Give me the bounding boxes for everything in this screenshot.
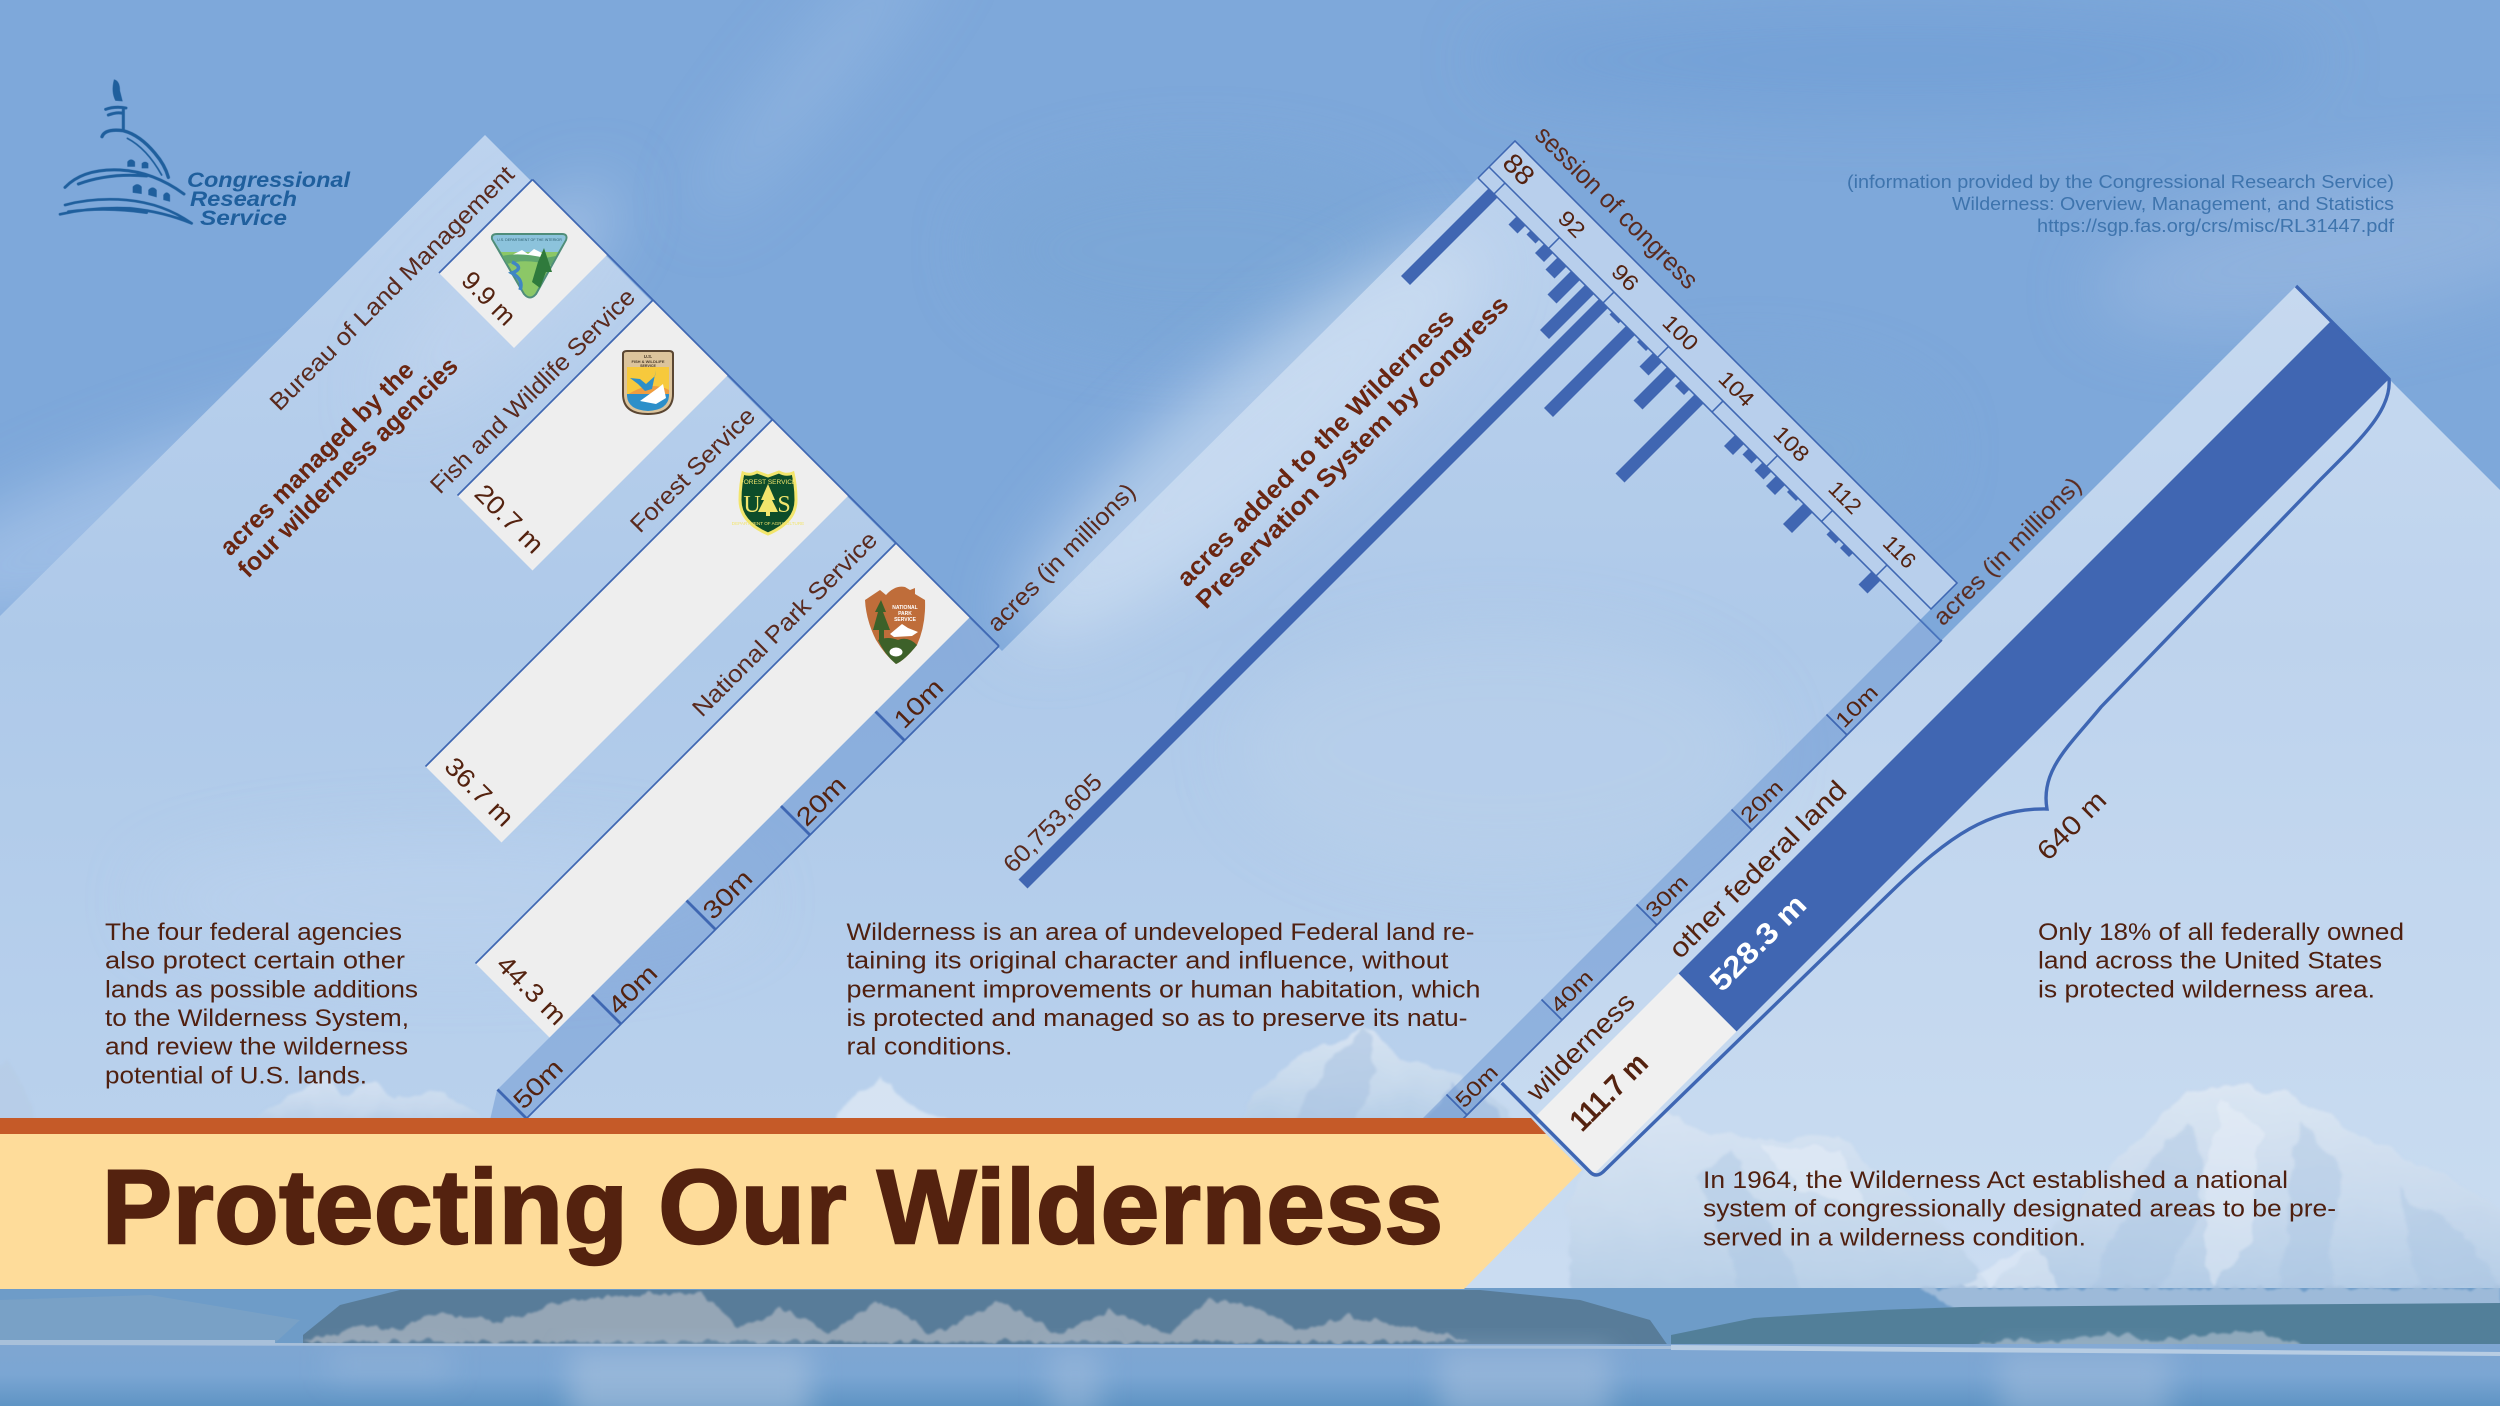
- text block: only 18 percent: is protected wilderness area.: [2038, 976, 2375, 1003]
- text block: 1964 act: system of congressionally designated areas to be pre-: [1703, 1196, 2336, 1223]
- icon: Bureau of Land Management badge: U.S. DEPARTMENT OF THE INTERIOR: [497, 238, 562, 242]
- icon: Forest Service badge: [732, 472, 804, 534]
- left distance: [0, 1295, 300, 1343]
- icon: National Park Service arrowhead: [865, 587, 925, 664]
- dome drawing: [60, 79, 192, 223]
- text block: wilderness definition: taining its original character and influence, without: [846, 948, 1449, 975]
- value: 20.7 m: 20.7 m: [469, 478, 550, 559]
- text block: wilderness definition: Wilderness is an area of undeveloped Federal land re-: [846, 919, 1474, 946]
- axis and bar edge lines: [0, 180, 999, 1202]
- session label: 100: 100: [1657, 310, 1703, 356]
- source note: Wilderness: Overview, Management, and Statistics: [1952, 193, 2394, 214]
- text block: wilderness definition: is protected and managed so as to preserve its natu-: [846, 1005, 1468, 1032]
- chart two: acres added by session of congress: [898, 120, 1978, 1222]
- orange stripe: [0, 1118, 1546, 1134]
- background: clouds: [0, 0, 2500, 669]
- chart one: acres managed by four agencies: [0, 161, 1141, 1203]
- session label: 116: 116: [1878, 530, 1921, 573]
- forest right: [1671, 1303, 2500, 1358]
- background: washed mountains: [0, 1026, 2500, 1300]
- value: 640 m: 640 m: [2031, 785, 2112, 866]
- right mountain base: [1920, 1288, 2500, 1312]
- icon: National Park Service arrowhead: NATIONAL: [892, 605, 918, 611]
- text block: wilderness definition: ral conditions.: [846, 1034, 1012, 1061]
- text block: four federal agencies: lands as possible additions: [105, 976, 418, 1003]
- label: Forest Service: Forest Service: [625, 402, 761, 538]
- agency bars: [0, 180, 999, 1202]
- axis band tail: [490, 1090, 527, 1120]
- icon: Forest Service badge: FOREST SERVICE: [740, 479, 797, 486]
- session label: 108: 108: [1768, 421, 1814, 467]
- mountain shading: [1700, 1120, 2500, 1290]
- value: 528.3 m: 528.3 m: [1704, 888, 1813, 998]
- band base: [0, 1288, 2500, 1348]
- shorelines: [0, 1340, 1671, 1349]
- wordmark line 2: Research: [190, 188, 297, 211]
- bar: National Park Service: [476, 543, 970, 1038]
- text block: 1964 act: served in a wilderness condition.: [1703, 1224, 2086, 1251]
- session label: 92: 92: [1553, 205, 1590, 243]
- wordmark line 3: Service: [200, 207, 287, 230]
- icon: National Park Service arrowhead: PARK: [898, 611, 912, 617]
- source note: [1847, 171, 2395, 236]
- text block: 1964 act: [1703, 1167, 2336, 1251]
- heading: acres managed: acres managed by the: [214, 356, 420, 561]
- axis band fill: [1420, 620, 1942, 1141]
- text block: 1964 act: In 1964, the Wilderness Act established a national: [1703, 1167, 2288, 1194]
- value: 44.3 m: 44.3 m: [491, 949, 573, 1031]
- axis label: 20m: 20m: [1736, 776, 1788, 828]
- banner: title strip: [0, 1118, 1582, 1289]
- source note: (information provided by the Congressional Research Service): [1847, 171, 2394, 192]
- label: acres in millions: acres (in millions): [1928, 472, 2087, 631]
- chart three: federal land total: [1502, 286, 2389, 1175]
- brace: 640 m: [1502, 286, 2389, 1175]
- axis label: 10m: 10m: [888, 673, 949, 734]
- axis label: 50m: 50m: [1451, 1061, 1503, 1113]
- logo: Congressional Research Service: [60, 79, 351, 230]
- value: 36.7 m: 36.7 m: [439, 751, 520, 832]
- label: Bureau of Land Management: Bureau of Land Management: [265, 161, 520, 416]
- bar: other federal land: [1678, 322, 2388, 1032]
- axis lines and ticks: [1420, 620, 1942, 1141]
- axis band: [498, 617, 999, 1118]
- axis label: 40m: 40m: [1546, 966, 1598, 1018]
- icon: Bureau of Land Management badge: [492, 234, 566, 298]
- heading: acres added: acres added to the Wilderness: [1171, 304, 1460, 592]
- session band: [898, 141, 1978, 1222]
- axis ticks: [498, 712, 904, 1118]
- label: wilderness: wilderness: [1520, 987, 1641, 1108]
- bar: wilderness: [1536, 974, 1736, 1174]
- label: session of congress: session of congress: [1529, 120, 1705, 295]
- background: panel clouds: [150, 159, 1760, 960]
- bar: Bureau of Land Management: [439, 180, 608, 348]
- icon: Fish and Wildlife Service badge: SERVICE: [640, 364, 656, 368]
- icon: Fish and Wildlife Service badge: [623, 351, 673, 414]
- label: Fish and Wildlife Service: Fish and Wildlife Service: [425, 284, 641, 499]
- text block: four federal agencies: and review the wilderness: [105, 1034, 408, 1061]
- text block: only 18 percent: land across the United States: [2038, 948, 2382, 975]
- label: acres in millions: acres (in millions): [982, 478, 1141, 637]
- axis label: 40m: 40m: [602, 959, 663, 1020]
- text block: wilderness definition: [846, 919, 1480, 1061]
- axis label: 30m: 30m: [697, 864, 758, 925]
- session label: 88: 88: [1497, 148, 1541, 191]
- axis frame lines: [1478, 141, 1978, 641]
- icon: Fish and Wildlife Service badge: U.S.: [644, 354, 652, 359]
- text block: four federal agencies: The four federal agencies: [105, 919, 402, 946]
- axis label: 10m: 10m: [1831, 681, 1883, 733]
- bar: Forest Service: [426, 420, 848, 842]
- icon: Forest Service badge: S: [777, 492, 791, 518]
- label: other federal land: other federal land: [1663, 775, 1853, 964]
- session label: 104: 104: [1713, 366, 1759, 412]
- tan hillside: [300, 1292, 1470, 1342]
- icon: National Park Service arrowhead: SERVICE: [894, 617, 917, 623]
- session ticks: [1494, 183, 1887, 576]
- text block: only 18 percent: [2038, 919, 2404, 1003]
- photo band: trees and shoreline: [0, 1288, 2500, 1406]
- axis label: 50m: 50m: [508, 1054, 569, 1115]
- wordmark line 1: Congressional: [187, 169, 351, 192]
- heading: four agencies: four wilderness agencies: [232, 352, 464, 583]
- text block: four federal agencies: also protect certain other: [105, 948, 405, 975]
- source note: https://sgp.fas.org/crs/misc/RL31447.pdf: [2037, 215, 2395, 236]
- icon: Forest Service badge: DEPARTMENT OF AGRICULTURE: [732, 521, 804, 526]
- icon: Forest Service badge: U: [743, 492, 761, 518]
- value: 111.7 m: 111.7 m: [1564, 1047, 1655, 1138]
- session label: 112: 112: [1823, 476, 1867, 519]
- text block: only 18 percent: Only 18% of all federally owned: [2038, 919, 2404, 946]
- water: [0, 1344, 2500, 1406]
- axis label: 30m: 30m: [1641, 871, 1693, 923]
- value: 60,753,605: 60,753,605: [998, 769, 1108, 878]
- label: National Park Service: National Park Service: [687, 526, 883, 722]
- background: chart three lighter panel: [1292, 286, 2500, 1290]
- tan shore right: [1950, 1330, 2330, 1350]
- cream arrow: [0, 1134, 1582, 1289]
- heading: preservation system: Preservation System by congress: [1190, 290, 1514, 614]
- chart three axis band: [1420, 472, 2087, 1141]
- title: Protecting Our Wilderness: [102, 1149, 1443, 1266]
- value: 9.9 m: 9.9 m: [456, 265, 522, 331]
- text block: wilderness definition: permanent improvements or human habitation, which: [846, 976, 1480, 1003]
- icon: Fish and Wildlife Service badge: FISH & WILDLIFE: [631, 359, 665, 364]
- session label: 96: 96: [1606, 259, 1644, 296]
- forest left: [303, 1290, 1671, 1350]
- text block: four federal agencies: [105, 919, 418, 1089]
- water reflections: [330, 1350, 2170, 1406]
- bars by congress: [908, 188, 1880, 1161]
- mountain peaks: [0, 1026, 2500, 1300]
- bar: Fish and Wildlife Service: [458, 300, 728, 570]
- text block: four federal agencies: potential of U.S. lands.: [105, 1062, 367, 1089]
- text block: four federal agencies: to the Wilderness System,: [105, 1005, 409, 1032]
- axis label: 20m: 20m: [791, 771, 852, 832]
